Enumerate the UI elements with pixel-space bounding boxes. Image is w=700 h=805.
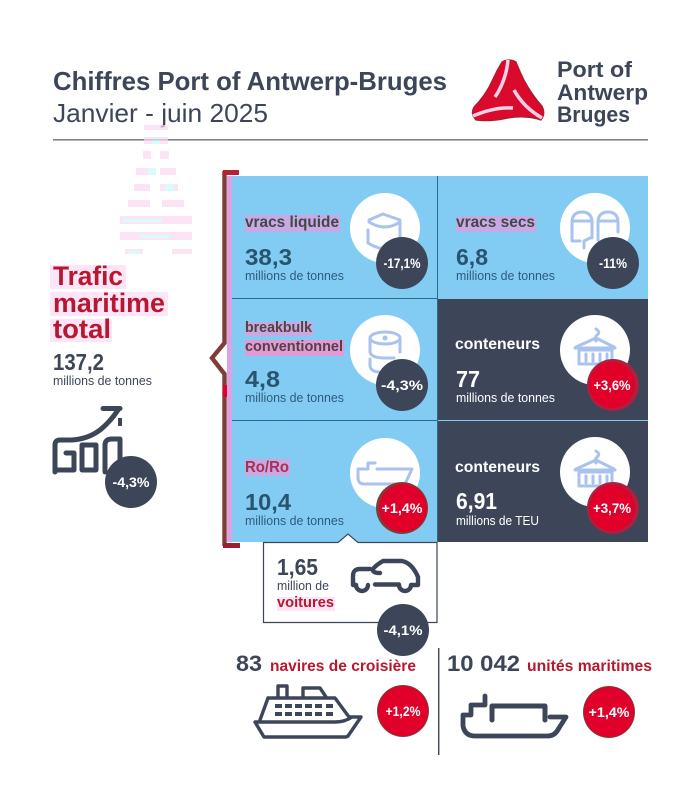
tile: conteneurs TEU	[438, 421, 648, 542]
cell: Ro/Ro: +1,4%	[382, 500, 423, 516]
callout: voitures: million de	[277, 578, 329, 593]
callout: voitures: -4,1%	[384, 622, 423, 638]
cell: conteneurs TEU: +3,7%	[593, 500, 632, 516]
badge: total change: -4,3%	[112, 474, 150, 490]
cell: vracs secs: 6,8	[456, 244, 488, 270]
logo: Bruges	[557, 102, 630, 127]
heading: trafic maritime total: Trafic	[53, 261, 123, 291]
bracket with arrow	[212, 170, 240, 548]
cell: conteneurs tonnes	[455, 315, 639, 411]
heading: trafic maritime total: maritime	[53, 288, 165, 318]
total tonnage: millions de tonnes	[53, 373, 152, 388]
title: Chiffres Port of Antwerp-Bruges	[53, 66, 447, 96]
logo: Antwerp	[557, 80, 648, 105]
block: unités maritimes: 10 042	[447, 651, 520, 676]
callout: voitures: voitures	[277, 595, 334, 611]
cell: vracs liquide: millions de tonnes	[245, 268, 344, 283]
total tonnage: 137,2	[53, 349, 104, 375]
cell: conteneurs TEU	[455, 437, 639, 534]
cell: breakbulk: conventionnel	[245, 338, 343, 355]
cell: vracs secs	[456, 193, 639, 289]
total tonnage	[53, 349, 152, 388]
cell: vracs liquide: 38,3	[245, 244, 292, 270]
tile: conteneurs tonnes	[438, 299, 648, 420]
divider	[438, 648, 439, 755]
icon: car	[353, 561, 418, 591]
cell: vracs secs: -11%	[599, 255, 627, 271]
tile: breakbulk	[228, 299, 437, 420]
cell: Ro/Ro	[245, 438, 428, 534]
cell: Ro/Ro: Ro/Ro	[245, 459, 289, 476]
badge: total change	[105, 456, 157, 508]
icon: cruise ship	[255, 686, 361, 737]
cell: conteneurs tonnes: 77	[456, 366, 480, 392]
title	[53, 66, 447, 128]
cell: conteneurs TEU: 6,91	[456, 488, 497, 514]
logo: Port of	[557, 57, 633, 82]
cell: conteneurs TEU: conteneurs	[455, 459, 540, 476]
cell: Ro/Ro: 10,4	[245, 489, 291, 515]
cell: breakbulk: millions de tonnes	[245, 390, 344, 405]
cell: vracs liquide: vracs liquide	[245, 214, 339, 231]
block: navires de croisière	[236, 651, 429, 737]
block: unités maritimes: +1,4%	[588, 704, 630, 720]
cell: vracs secs: vracs secs	[456, 214, 535, 231]
block: navires de croisière: 83	[236, 651, 262, 676]
cell: conteneurs tonnes: +3,6%	[594, 377, 631, 393]
panel: tile grid	[228, 176, 437, 298]
heading: trafic maritime total: total	[53, 314, 111, 344]
block: unités maritimes: unités maritimes	[527, 658, 652, 675]
icon: barge	[463, 696, 566, 736]
callout: voitures	[264, 534, 437, 656]
block: navires de croisière: +1,2%	[386, 703, 421, 719]
title: Janvier - juin 2025	[53, 98, 268, 128]
tile: vracs liquide	[228, 176, 437, 298]
cell: conteneurs tonnes: conteneurs	[455, 336, 540, 353]
cell: conteneurs tonnes: millions de tonnes	[456, 390, 555, 405]
tile: Ro/Ro	[228, 421, 437, 542]
heading: trafic maritime total	[50, 261, 168, 344]
cell: breakbulk: breakbulk	[245, 319, 313, 336]
tile: vracs secs	[438, 176, 648, 298]
cell: breakbulk: 4,8	[245, 366, 280, 392]
logo	[472, 57, 648, 127]
cell: vracs liquide: -17,1%	[384, 255, 421, 271]
cell: breakbulk	[245, 315, 428, 411]
block: unités maritimes	[447, 651, 652, 738]
block: navires de croisière: navires de croisière	[270, 658, 416, 675]
grid dividers	[228, 176, 438, 542]
callout: voitures: 1,65	[277, 554, 318, 580]
cell: breakbulk: -4,3%	[381, 377, 424, 393]
cell: conteneurs TEU: millions de TEU	[456, 513, 539, 528]
cell: Ro/Ro: millions de tonnes	[245, 513, 344, 528]
cell: vracs secs: millions de tonnes	[456, 268, 555, 283]
decorative tower artifact	[120, 125, 192, 254]
icon: growth chart	[55, 408, 120, 472]
cell: vracs liquide	[245, 193, 428, 289]
